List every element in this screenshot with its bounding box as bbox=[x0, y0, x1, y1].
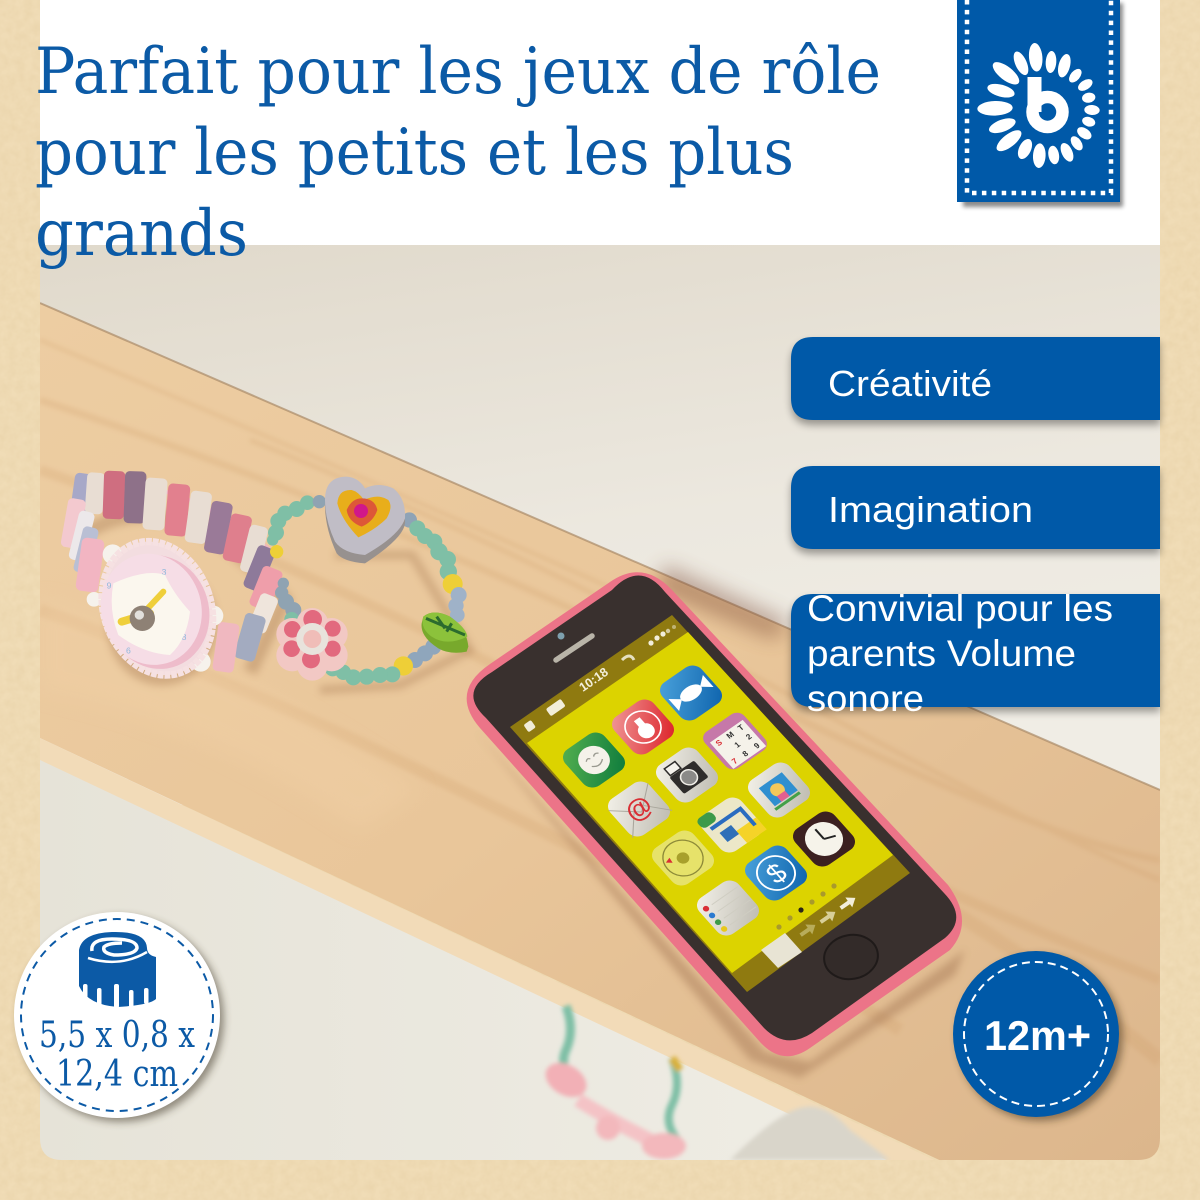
white header band bbox=[40, 0, 1160, 245]
phone shadow on shelf bbox=[512, 772, 964, 1080]
app: calendar: 7 bbox=[730, 756, 740, 766]
app: mail: @ bbox=[618, 790, 659, 827]
size badge shadow bbox=[18, 916, 224, 1122]
app: calendar: M bbox=[725, 730, 736, 740]
title: pour les petits et les plus bbox=[35, 116, 794, 190]
toy watch bracelet bbox=[60, 471, 284, 691]
size text bbox=[39, 1015, 195, 1095]
watch pearl ring bbox=[98, 538, 216, 679]
phone screen bezel bbox=[510, 615, 910, 992]
app: calendar: 2 bbox=[744, 732, 754, 741]
camera lens bbox=[558, 632, 564, 640]
flower bead bbox=[276, 608, 348, 681]
app: clock bbox=[788, 807, 860, 871]
tag: parent friendly: parents Volume bbox=[807, 633, 1076, 674]
size badge bbox=[14, 912, 224, 1122]
phone black face bbox=[473, 575, 956, 1040]
watch white bow bbox=[112, 573, 190, 655]
age text: 12m+ bbox=[984, 1012, 1091, 1059]
brand logo tag bbox=[957, 0, 1123, 207]
title: Parfait pour les jeux de rôle bbox=[35, 35, 881, 109]
status bar bbox=[523, 625, 676, 732]
beads bbox=[267, 495, 467, 685]
app: mail bbox=[608, 782, 672, 838]
app: compass bbox=[652, 830, 714, 886]
watch dial numerals: 6 bbox=[126, 645, 131, 655]
tag: parent friendly: sonore bbox=[807, 678, 924, 719]
app: money: $ bbox=[760, 857, 793, 889]
bottom dock bbox=[761, 893, 859, 968]
bracelet shadow on shelf bbox=[75, 516, 470, 690]
app: notes bbox=[692, 876, 764, 940]
logo flower bbox=[977, 42, 1100, 168]
logo shadow bbox=[963, 3, 1123, 207]
lower wall bbox=[40, 760, 886, 1160]
app: calendar: 1 bbox=[733, 740, 743, 749]
tag: imagination bbox=[791, 466, 1160, 554]
title: grands bbox=[35, 197, 248, 271]
title bbox=[35, 35, 881, 271]
app: chat bbox=[563, 732, 625, 788]
tag: parent friendly: Convivial pour les bbox=[807, 588, 1113, 629]
watch dial numerals: 8 bbox=[182, 632, 187, 642]
size badge stitching bbox=[21, 919, 213, 1111]
watch dial numerals: 3 bbox=[162, 567, 167, 577]
blurred hanging bracelet bbox=[539, 1006, 686, 1159]
tag: creativity bbox=[791, 337, 1160, 425]
toy smartphone bbox=[467, 572, 962, 1056]
app: photos bbox=[748, 762, 810, 818]
app: music bbox=[612, 700, 674, 754]
product photo bbox=[40, 245, 1160, 1170]
watch dial numerals: 9 bbox=[107, 580, 112, 590]
page dots bbox=[776, 883, 837, 930]
size text: 12,4 cm bbox=[56, 1054, 178, 1095]
logo panel bbox=[957, 0, 1120, 202]
app: map bbox=[697, 798, 766, 852]
age badge stitching bbox=[964, 962, 1108, 1106]
wall shadow behind phone bbox=[655, 565, 790, 640]
tag: parent friendly bbox=[791, 588, 1160, 719]
leaf bead bbox=[422, 612, 468, 653]
watch face bbox=[126, 556, 210, 669]
heart bead bbox=[325, 477, 405, 563]
phone pink case bbox=[467, 572, 962, 1056]
size badge disc bbox=[14, 912, 220, 1118]
icon: measuring tape bbox=[79, 932, 156, 1008]
logo stitching bbox=[967, 0, 1111, 193]
watch hands bbox=[122, 592, 163, 631]
bead bracelet bbox=[267, 477, 468, 685]
watch white studs bbox=[87, 544, 223, 672]
speaker bbox=[556, 636, 592, 660]
watch dial numerals bbox=[107, 567, 187, 655]
wall bbox=[40, 245, 1160, 805]
tag: creativity: Créativité bbox=[828, 363, 992, 404]
app: calendar: 9 bbox=[752, 741, 762, 750]
tag: imagination: Imagination bbox=[828, 489, 1033, 530]
app: calendar: S bbox=[714, 738, 725, 748]
home button bbox=[823, 934, 879, 980]
blurred knitted toy bbox=[730, 1107, 890, 1160]
app: money bbox=[740, 841, 812, 905]
logo letter b bbox=[1032, 77, 1062, 127]
app: camera bbox=[656, 748, 718, 802]
phone yellow screen bbox=[527, 632, 893, 973]
app: calendar: T bbox=[736, 723, 746, 732]
status bar: 10:18 bbox=[577, 665, 611, 695]
app: calendar: 8 bbox=[741, 749, 751, 758]
app: calendar bbox=[703, 712, 767, 770]
age badge bbox=[953, 951, 1123, 1121]
wooden shelf bbox=[40, 303, 1160, 1165]
age badge disc bbox=[953, 951, 1119, 1117]
app: candy bbox=[660, 666, 722, 720]
watch strap bbox=[60, 471, 284, 673]
size text: 5,5 x 0,8 x bbox=[39, 1015, 195, 1056]
age badge shadow bbox=[957, 955, 1123, 1121]
